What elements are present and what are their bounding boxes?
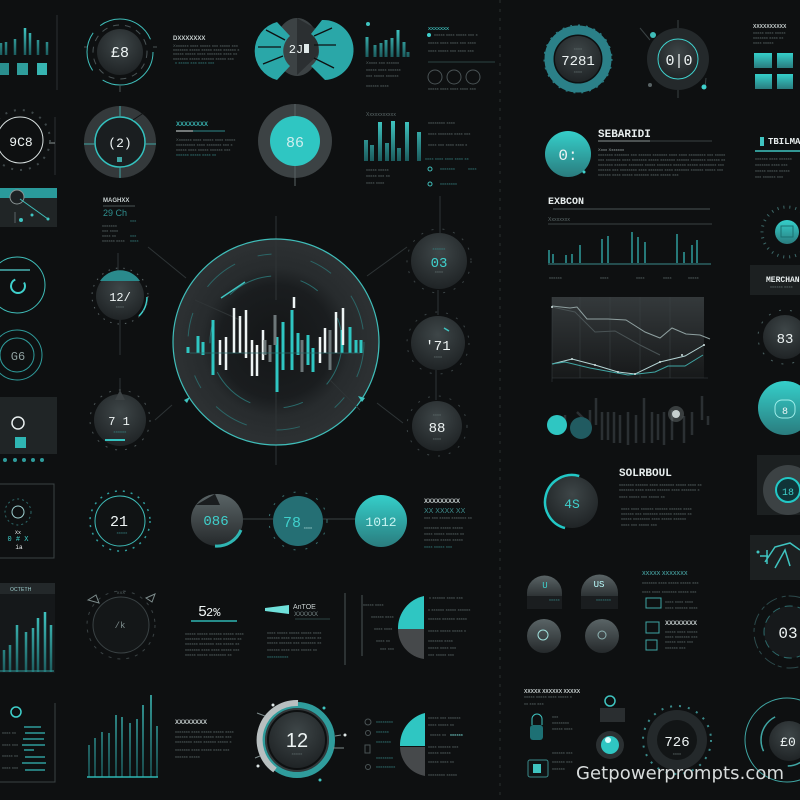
- chart: half pie upper: [345, 593, 470, 665]
- panel: right TBILMAD text: xxxxxxx xxxx xxx: [755, 162, 788, 167]
- dome cards: xxxxx: [549, 597, 560, 602]
- text block with icons: top middle: xxxxx xxxx xxxx xxxx xxx: [428, 86, 476, 91]
- chart: half pie lower with icons: xxxxxxxx xxxxx: [428, 772, 457, 777]
- panel: MERCHANC: [750, 265, 800, 295]
- text block and icons: bottom-right legend: [524, 689, 581, 777]
- text block with icons: top middle: XXXXXXX: [428, 26, 449, 31]
- panel: top-right tiles: [753, 24, 793, 89]
- main radial waveform: [173, 239, 379, 445]
- gauge: 78: 78: [283, 515, 301, 532]
- right column gauge: icon: [762, 207, 800, 257]
- panel: top-right tiles: xxxxxxx xxxx xx: [753, 35, 783, 40]
- text block: teal heading: [176, 122, 235, 157]
- gauge: 12: 12: [286, 730, 308, 752]
- text block: teal heading: XXXXXXXX: [176, 122, 208, 128]
- text block: left stat: xxx: [130, 218, 136, 223]
- gauge: winged segments: 2J: [289, 43, 303, 57]
- gauge and article: SOLRBOUL: xxxxx xxxxxxxx xxxx xxxxx xxxxxx: [621, 516, 686, 521]
- panel: top-left bars and tiles: [0, 28, 47, 75]
- chart: half pie lower with icons: xxxxx xxxxx: [428, 750, 451, 755]
- watermark: Getpowerprompts.com: [576, 763, 784, 784]
- chart: half pie upper: xxx xxx: [380, 646, 394, 651]
- chart: half pie lower with icons: [365, 713, 463, 777]
- gauge: 86: [258, 104, 332, 186]
- panel: left spiral box: Xx: [15, 530, 21, 536]
- panel: EXBCON heading and bar chart: xxxxxx: [549, 275, 562, 280]
- callout: arrow wedge with text: [265, 604, 330, 659]
- stat: 52%: 5: [198, 604, 207, 621]
- gauge: 71: xxxx: [434, 354, 442, 359]
- callout: circle 03 with article: xxxxxxx xxxxxxx xxx xxxxxx xxxxxxx xxxx xxxx xxxxxxxx xxx xxxxx: [598, 152, 725, 157]
- chart: half pie lower with icons: xxxx xxxxxx xxx: [428, 744, 458, 749]
- text block: gauges caption: xxxxxxx xxxxx xxxxx: [424, 525, 463, 530]
- gauge: top icon ring: £8: [111, 45, 129, 62]
- gauge: 83: [758, 310, 800, 364]
- chart: half pie lower with icons: xxxxxxx: [376, 739, 391, 744]
- panel: gauge 18: [757, 455, 800, 515]
- panel: horizontal bars bottom-left: xxxx xx: [2, 730, 16, 735]
- panel: EXBCON heading and bar chart: xxxxx: [688, 275, 699, 280]
- gauge: 726: 726: [664, 735, 690, 751]
- panel: right TBILMAD text: xxxxx xxxxx xxxxx: [755, 168, 790, 173]
- text block with icons: top middle: [427, 26, 495, 91]
- divider line: [55, 15, 57, 175]
- gauge: 12: [255, 703, 346, 782]
- gauge: 7281: 7281: [561, 54, 595, 70]
- text block and icons: bottom-right legend: xxxxx xxxx: [552, 726, 573, 731]
- text block and icons: bottom-right legend: xxxxxx xxx: [552, 750, 573, 755]
- text block with icons: second middle: xxxxxxxx: [440, 181, 457, 186]
- chart: half pie lower with icons: xxxxx xx: [430, 732, 446, 737]
- text block: gauges caption: xxxx xxxxx xxxxxx xx: [424, 531, 464, 536]
- gauge: 12: xxxxx: [292, 751, 302, 756]
- gauge: bottom-right rings: £0: [780, 735, 796, 750]
- stat: 52%: xxxxxxx xxxxx xxxx xxxxxx xx: [185, 636, 242, 641]
- text block with icons: right middle: XXXXXXXX: [665, 621, 697, 627]
- gauge: 78: xxxx: [304, 525, 312, 530]
- text block: left stat: xxxxxx xxxx: [102, 238, 125, 243]
- text block with icons: right middle: xxxxx xxxx xxxxx: [665, 629, 698, 634]
- chart: half pie upper: xxxxxx xxxx: [371, 614, 394, 619]
- callout: circle 03 with article: Xxxx Xxxxxxx: [598, 147, 624, 152]
- chart: half pie upper: xxxx xx: [376, 638, 390, 643]
- text block: gauges caption: xxxxxxx xxxxx xxxxx: [424, 537, 463, 542]
- callout: arrow wedge with text: xxxxxx xxxx xxxx xxxxx xx: [267, 647, 317, 652]
- callout: circle 03 with article: xxxxxxx xxxxxx xxxxxxx xxxxx xxxxxxx xxxxxx xxxxx xxxxxxxx xxx: [598, 162, 724, 167]
- gauge: 086: [191, 494, 243, 546]
- chart: half pie upper: xxxxxxx xxxx: [428, 638, 453, 643]
- text block: bottom: xxxxxxx xxxx xxxxx xxxx xxx: [175, 747, 230, 752]
- text block: left stat: [102, 198, 139, 243]
- callout: circle 03 with article: xxx xxxxxxx xxxx xxxxxxx xxxxx xxxxxxx xxxxxx xxxxxxx xxxxxx xx: [598, 157, 725, 162]
- text block: left stat: MAGHXX: [103, 198, 129, 204]
- text block: teal heading: xxxxxx xxxxx xxxx xx: [176, 152, 216, 157]
- bar chart: top: [366, 22, 408, 88]
- text block: top intro: xxxxxxx xxxxx xxxxx xxxx xxxxxx x: [173, 47, 240, 52]
- text block: bottom: xxxxxxxx xxxx xxxxxx xxxxx x: [175, 739, 232, 744]
- gauge: 71: '71: [425, 339, 451, 355]
- text block with icons: second middle: xxxxxxxx xxxx: [428, 120, 455, 125]
- text block and icons: bottom-right legend: xx xxx xxx: [524, 701, 544, 706]
- panel: top-right tiles: XXXXXXXXXX: [753, 24, 787, 30]
- text block: bottom: xxxxxxx xxxx xxxxx xxxxx xxxx: [175, 729, 234, 734]
- callout: circle 03 with article: [545, 129, 725, 177]
- gauge: 88: xxxx: [433, 412, 441, 417]
- gauge: 71: [407, 312, 469, 374]
- callout: arrow wedge with text: xxxx xxxxx xxxxx xxxxx xxxx: [267, 630, 322, 635]
- gauge: 83: 83: [777, 332, 793, 348]
- gauge: 03: [407, 229, 471, 293]
- chart: half pie upper: xxxxx xxxx xxx: [428, 645, 456, 650]
- bar chart: second: xxxxx xxx xx: [366, 173, 390, 178]
- chart: half pie lower with icons: xxxxxxxx: [376, 719, 393, 724]
- icon rings: left column: [0, 257, 45, 380]
- gauge and article: SOLRBOUL: xxxxxxx xxxx xxxxx xxxxxx xxxx xxxxxxx x: [619, 487, 700, 492]
- text block with icons: right middle: xxxx xxxxxx xxxx: [665, 605, 698, 610]
- gauge: 03: 03: [431, 256, 447, 272]
- gauge: 1012: 1012: [365, 515, 397, 530]
- gauge: right 03 rings: [754, 596, 800, 668]
- text block: gauges caption: xxx xxx xxxxx xxxxxxx xx: [424, 515, 472, 520]
- gauge: 7281: [544, 25, 612, 93]
- stat: 52%: xxxxxxx xxxx xxxx xxxxx xxx: [185, 647, 240, 652]
- callout: arrow wedge with text: AnTOE: [293, 604, 316, 611]
- gauge: 7281: xxxx: [574, 46, 582, 51]
- panel: right TBILMAD text: xxx xxxxxx xxx: [755, 174, 783, 179]
- text block with icons: right middle: xxxx xxxxxxx xxx: [665, 634, 698, 639]
- text block with icons: right middle: XXXXX XXXXXXX: [642, 571, 688, 577]
- gauge: 21: 21: [110, 514, 128, 531]
- text block: left stat: xxxx: [130, 238, 139, 243]
- gauge: 010: [640, 20, 709, 98]
- bar chart: top: xxx xxxxx xxxxxx: [366, 73, 399, 78]
- text block with icons: right middle: xxxx xxxx xxxxxxx xxxxx xxx: [642, 589, 696, 594]
- gauge: winged segments: [255, 18, 354, 80]
- text block with icons: top middle: xxxx xxxxx xxx xxxx xxx: [428, 48, 474, 53]
- text block with icons: second middle: xxxx xxx xxxx xxxx x: [428, 142, 467, 147]
- chart: half pie upper: xxxxx xxxxx xxxxx x: [428, 628, 466, 633]
- text block: top intro: x xxxxx xxx xxxx xxx: [175, 60, 214, 65]
- gauge: right 03 rings: 03: [778, 625, 798, 643]
- bar chart: top: Xxxxx xxx xxxxxx: [366, 60, 399, 65]
- panel: teal network: [750, 535, 800, 580]
- gauge: 78: [269, 492, 327, 550]
- dome cards: US: [594, 580, 604, 590]
- gauge: 12/: xxxx: [116, 304, 124, 309]
- icon rings: left column: G6: [11, 350, 25, 364]
- text block: left stat: xxx xxxx: [102, 228, 118, 233]
- gauge: 03: xxxxxx: [433, 246, 445, 251]
- gauge and article: SOLRBOUL: xxxx xxx xxxxx xxx: [621, 522, 657, 527]
- text block: bottom: [175, 720, 234, 759]
- gauge: faint technical ring: [87, 590, 155, 659]
- dome cards: [527, 574, 619, 653]
- gauge: bottom-right rings: [745, 698, 800, 782]
- callout: arrow wedge with text: xxxxxx xxxx xxxxxx xxxxx xx: [267, 635, 322, 640]
- chart: half pie lower with icons: xxxxxx: [376, 729, 389, 734]
- stat: 52%: xxxxx xxxxx xxxxxx xxxxx xxxx: [185, 631, 244, 636]
- text block with icons: right middle: xxxxx xxxx xxx: [665, 639, 693, 644]
- text block: bottom: xxxxxx xxxxx: [175, 754, 200, 759]
- gauge and article: SOLRBOUL: xxxxxxx xxxxxx xxxx xxxxxxx xxxxx xxxx xx: [619, 482, 702, 487]
- panel: EXBCON heading and bar chart: xxxx: [600, 275, 609, 280]
- panel: bar chart left: [0, 583, 55, 673]
- circle: teal 8: [758, 381, 800, 435]
- text block: top intro: xxxxx xxxxx xxxx xxxxxxx xxxx xx: [173, 51, 237, 56]
- gauge: 086: 086: [203, 514, 229, 530]
- connector lines: [118, 196, 440, 465]
- callout: circle 03 with article: 0:: [558, 147, 578, 165]
- text block with icons: second middle: xxxx: [468, 166, 477, 171]
- gauge: 21: [90, 491, 150, 551]
- text block: gauges caption: [424, 499, 472, 549]
- panel: EXBCON heading and bar chart: EXBCON: [548, 197, 584, 208]
- waveform bars: [188, 297, 361, 392]
- text block: gauges caption: XXXXXXXXX: [424, 499, 460, 505]
- panel: top-right tiles: xxxxx xxxx xxxxx: [753, 30, 786, 35]
- dashed centre divider: [499, 0, 501, 800]
- callout: circle 03 with article: SEBARIDI: [598, 129, 651, 141]
- panel: bar chart left: OCTETH: [10, 587, 32, 593]
- chart: half pie upper: x xxxxxx xxxx xxx: [429, 595, 463, 600]
- gauge: 21: xxxxx: [117, 530, 127, 535]
- panel: horizontal bars bottom-left: [0, 703, 55, 782]
- gauge: 726: xxxx: [673, 751, 681, 756]
- text block: left stat: 29 Ch: [103, 208, 127, 218]
- chart: half pie upper: xxxxx xxxx: [363, 602, 384, 607]
- panel: right TBILMAD text: xxxxxx xxxx xxxxxx: [755, 156, 792, 161]
- bar chart: bottom rising: [87, 695, 158, 777]
- gauge: faint technical ring: XXX: [117, 590, 125, 595]
- text block with icons: second middle: xxxx xxxx xxxx xxxx xx: [425, 156, 469, 161]
- text block with icons: right middle: xxxxxx xxx: [665, 645, 686, 650]
- panel: gauge 18: 18: [782, 488, 794, 499]
- gauge: 7 1: xxxxxx: [114, 429, 126, 434]
- text block and icons: bottom-right legend: xxxxx xxxxx xxxx xxxxx x: [524, 694, 572, 699]
- text block with icons: top middle: xxxxx xxxx xxxx xxx xxxx: [428, 40, 476, 45]
- panel: horizontal bars bottom-left: xxxxx xx: [2, 753, 18, 758]
- text block: top intro: xxxxxxx xxxxx xxxxxx xxxxx xxx: [173, 56, 234, 61]
- stat: 52%: xxxxx xxxxx xxxxxxxx xx: [185, 652, 232, 657]
- text block with icons: second middle: xxxx xxxxxxx xxxx xxx: [428, 131, 470, 136]
- text block: gauges caption: XX XXXX XX: [424, 508, 466, 515]
- gauge: faint technical ring: /k: [115, 621, 125, 631]
- gauge: 12/: 12/: [109, 291, 131, 305]
- gauge: 7 1: 7 1: [108, 415, 130, 429]
- gauge: 88: xxxx: [433, 436, 441, 441]
- text block and icons: bottom-right legend: xxxxxxxx: [552, 720, 569, 725]
- callout: circle 03 with article: xxxxxx xxxx xxxxx xxxxxxx xxxx xxxxx xxx: [598, 172, 679, 177]
- panel: right TBILMAD text: [755, 137, 800, 179]
- chart: half pie lower with icons: xxxxx xxx xxxxxx: [428, 715, 461, 720]
- waveform strip: [547, 396, 708, 445]
- bar chart: top: xxxxx xxxx xxxxxx: [366, 67, 401, 72]
- gauge: 1012: [355, 495, 407, 547]
- gauge: 12/: [92, 268, 148, 324]
- text block: left stat: xxxxxxx: [102, 223, 117, 228]
- gauge and article: SOLRBOUL: xxxxxx xxx xxxxxxx xxxxxx xxxxxx xx: [621, 511, 692, 516]
- text block: teal heading: xxxxx xxxx xxxxx xxxxxx xxx: [176, 147, 230, 152]
- panel: EXBCON heading and bar chart: xxxx: [663, 275, 672, 280]
- panel: left spiral box: [0, 484, 54, 558]
- text block with icons: second middle: xxxxxxx: [440, 166, 455, 171]
- text block: bottom: XXXXXXXX: [175, 720, 207, 726]
- gauge: left 9C8: 9C8: [9, 135, 33, 150]
- text block: bottom: xxxxxx xxxxxx xxxxx xxxx xxx: [175, 734, 232, 739]
- gauge: segmented ring: (2): [108, 136, 132, 151]
- gauge and article: SOLRBOUL: 4S: [564, 497, 580, 512]
- chart: half pie lower with icons: xxxxxxxx: [376, 755, 393, 760]
- gauge and article: SOLRBOUL: xxxx xxxx xxxxxx xxxxxx xxxxxx xxxx: [621, 506, 692, 511]
- bar chart: second: xxxxx xxxxx: [366, 167, 389, 172]
- gauge and article: SOLRBOUL: SOLRBOUL: [619, 468, 672, 480]
- panel: horizontal bars bottom-left: xxxx xxx: [2, 742, 18, 747]
- chart: half pie upper: xxxx xxxx: [374, 626, 392, 631]
- bar chart: top: xxxxxx xxxx: [366, 83, 389, 88]
- panel: left spiral box: 0 # X: [7, 536, 29, 544]
- text block with icons: second middle: [425, 120, 477, 186]
- panel: horizontal bars bottom-left: xxxx xxx: [2, 765, 18, 770]
- bar chart: second: xxxx xxxx: [366, 180, 384, 185]
- gauge: 86: 86: [286, 135, 304, 152]
- chart: half pie upper: x xxxxxx xxxxx xxxxxx: [428, 607, 470, 612]
- connector dashes: [243, 518, 355, 520]
- panel: left icons: [0, 397, 57, 462]
- text block with icons: right middle: xxxxxxx xxxx xxxxx xxxxx xxx: [642, 580, 699, 585]
- text block with icons: top middle: xxxxx xxxx xxxxx xxx x: [434, 32, 478, 37]
- dome cards: xxxxxxx: [596, 597, 611, 602]
- bar chart: second: Xxxxxxxxxxx: [366, 112, 396, 118]
- circle: teal 8: 8: [782, 407, 788, 418]
- gauge and article: SOLRBOUL: xxxx xxxxx xxx xxxxx xx: [619, 494, 665, 499]
- gauge: 88: [407, 396, 467, 456]
- panel: left spiral box: ia: [15, 544, 23, 551]
- text block: gauges caption: xxxx xxxxx xxx: [424, 544, 452, 549]
- text block and icons: bottom-right legend: XXXXX XXXXXX XXXXX: [524, 689, 581, 695]
- gauge: 7 1: [90, 390, 150, 450]
- text block and icons: bottom-right legend: xxxxxx: [552, 766, 565, 771]
- text block: top intro: DXXXXXXX: [173, 36, 205, 42]
- stat: 52%: xxxxxx xxxxxxx xxx xxxxx xx: [185, 641, 240, 646]
- text block with icons: right middle: xxxx xxxx xxxx: [665, 599, 693, 604]
- gauge: 7281: xxxx: [574, 69, 582, 74]
- text block with icons: right middle: [642, 571, 699, 650]
- gauge: 03: xxxx: [435, 269, 443, 274]
- chart: half pie upper: xxxxxx xxxxxx xxxxx: [428, 616, 467, 621]
- line chart: [551, 297, 710, 382]
- chart: half pie upper: xxx xxxxx xxx: [428, 652, 454, 657]
- gauge: 726: [643, 706, 711, 774]
- gauge: segmented ring: [84, 106, 156, 178]
- text block: left stat: xxxx xx: [102, 233, 116, 238]
- dome cards: U: [542, 581, 548, 591]
- panel: EXBCON heading and bar chart: xxxx: [636, 275, 645, 280]
- callout: arrow wedge with text: XXXXXX: [294, 612, 318, 618]
- text block: teal heading: Xxxxxxx xxxx xxxxx xxxx xxxxx: [176, 137, 235, 142]
- chart: half pie lower with icons: xxxxxxxxx: [376, 764, 395, 769]
- bar chart: second: [366, 112, 419, 185]
- panel: EXBCON heading and bar chart: Xxxxxxxx: [548, 217, 570, 223]
- callout: arrow wedge with text: xxxxxxxxxx: [267, 654, 288, 659]
- gauge: top icon ring: [84, 19, 157, 92]
- text block and icons: bottom-right legend: xxxxxx xxx: [552, 759, 573, 764]
- text block: teal heading: xxxxxxxxx xxxx xxxxxxx xxx x: [176, 142, 233, 147]
- text block and icons: bottom-right legend: xxx: [552, 714, 558, 719]
- chart: half pie lower with icons: xxxxx xxxx xx: [428, 759, 454, 764]
- text block: top intro: [173, 36, 240, 65]
- panel: EXBCON heading and bar chart: [548, 197, 712, 280]
- panel: MERCHANC: xxxxxx xxxx: [770, 284, 793, 289]
- chart: half pie lower with icons: xxxxxx: [450, 732, 463, 737]
- left teal panel: [0, 188, 57, 227]
- gauge: left 9C8: [0, 110, 55, 170]
- text block: top intro: Xxxxxxx xxxx xxxxx xxx xxxxx xxx: [173, 43, 238, 48]
- gauge and article: SOLRBOUL: [539, 468, 702, 535]
- text block: left stat: xxx: [130, 233, 136, 238]
- panel: top-right tiles: xxxx xxxxx: [753, 40, 774, 45]
- callout: circle 03 with article: xxxxxx xxx xxxxxxxx xxxx xxxxxxx xxxx xxxxxxx xxxxxx xxxxx xxx: [598, 167, 723, 172]
- stat: 52%: 2%: [206, 606, 221, 620]
- gauge: 88: 88: [429, 421, 445, 437]
- callout: arrow wedge with text: xxxxx xxxxxx xxx xxxxxxx xx: [267, 640, 322, 645]
- gauge: 010: 0|0: [665, 53, 693, 70]
- chart: half pie lower with icons: xxxx xxxxx xx: [428, 722, 454, 727]
- stat: 52%: [185, 604, 244, 657]
- icons: ring and sphere: [596, 696, 625, 759]
